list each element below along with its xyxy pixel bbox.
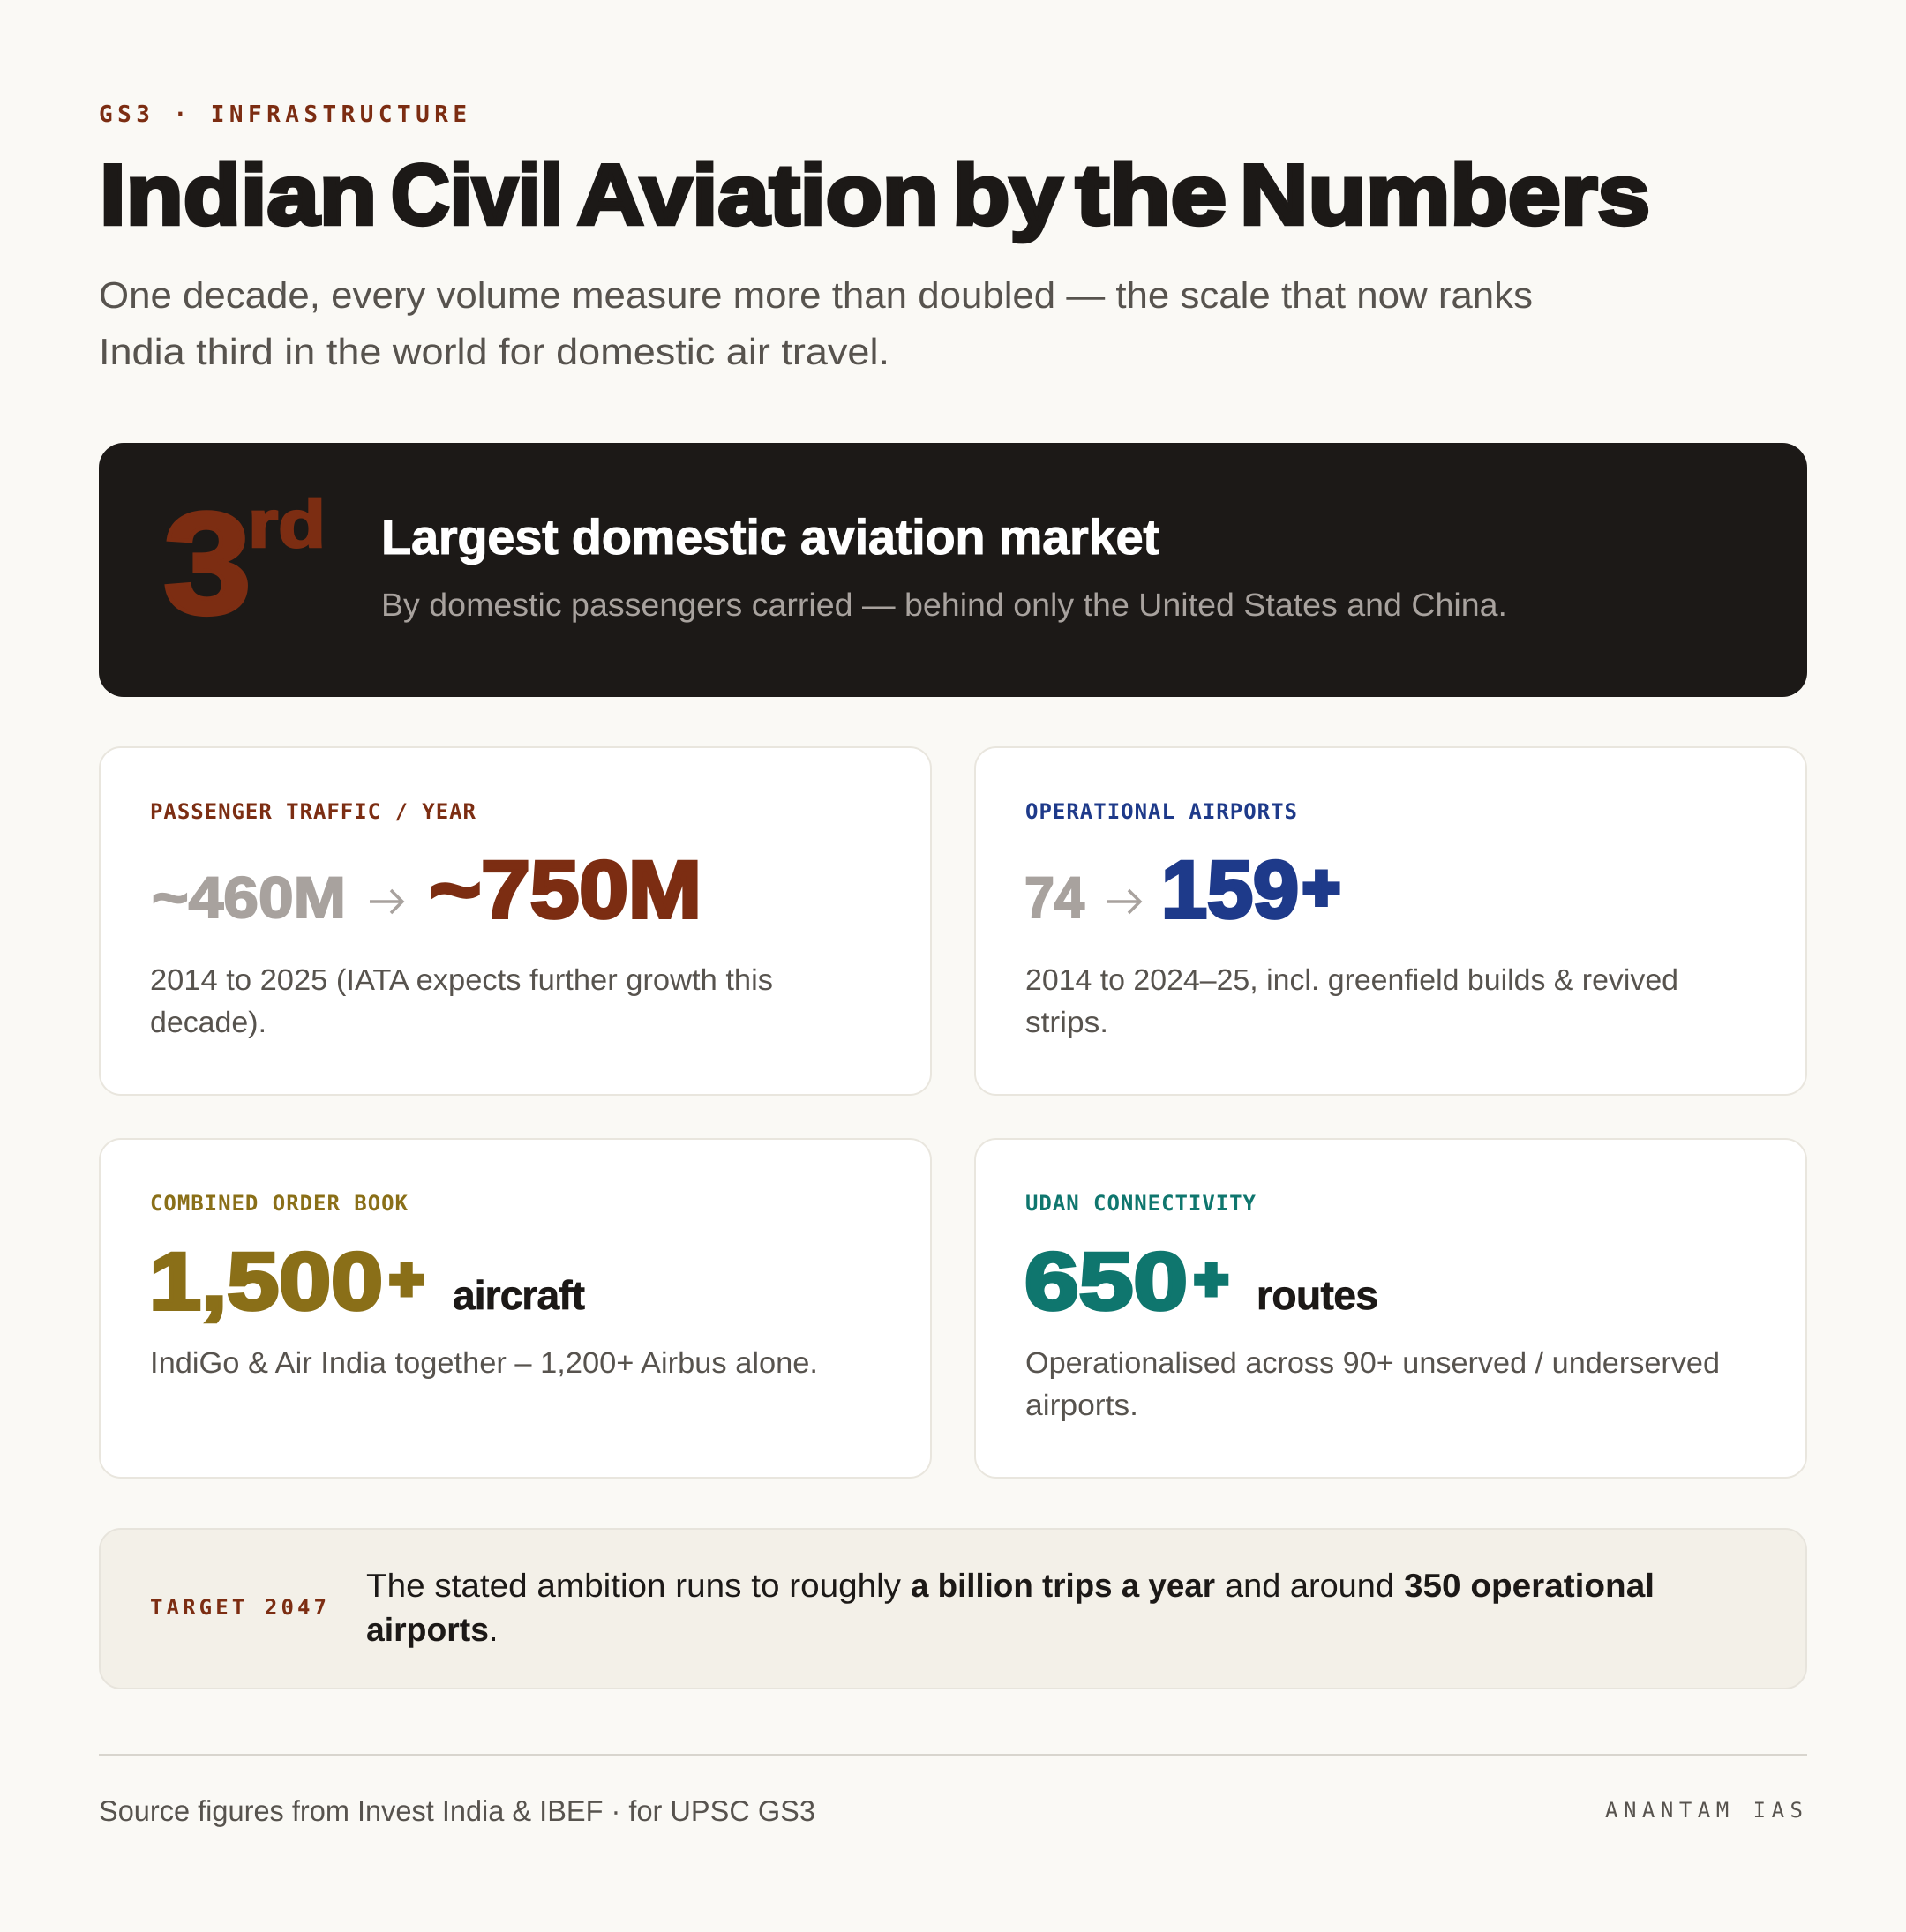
callout text: a billion trips a year [911, 1567, 1215, 1604]
arrow [370, 890, 402, 913]
panel heading: Largest domestic aviation market [381, 509, 1159, 565]
panel: 3rd largest market [99, 443, 1807, 697]
subtitle [99, 274, 1533, 372]
description: IndiGo & Air India together – 1,200+ Airbus alone. [150, 1347, 818, 1380]
arrow [1107, 890, 1140, 913]
description: strips. [1025, 1007, 1108, 1039]
callout text: . [489, 1611, 498, 1648]
card: combined order book [100, 1139, 931, 1478]
callout: target 2047 [100, 1529, 1806, 1689]
value: 1,500 [149, 1237, 383, 1327]
card: UDAN connectivity [975, 1139, 1806, 1478]
title: Aviation [577, 146, 939, 243]
subtitle: One decade, every volume measure more than doubled — the scale that now ranks [99, 274, 1533, 316]
card: passenger traffic [100, 747, 931, 1095]
card label: COMBINED ORDER BOOK [150, 1191, 409, 1216]
description: Operationalised across 90+ unserved / underserved [1025, 1347, 1720, 1380]
rank figure: 3rd [163, 483, 326, 644]
description: 2014 to 2025 (IATA expects further growth this [150, 964, 773, 997]
callout text: airports [366, 1611, 489, 1648]
footer source note: Source figures from Invest India & IBEF · for UPSC GS3 [99, 1794, 815, 1827]
subtitle: India third in the world for domestic air travel. [99, 331, 889, 372]
rank figure: 3rd: rd [248, 487, 326, 562]
description: decade). [150, 1007, 266, 1039]
new value: + [1303, 853, 1339, 922]
callout text [366, 1567, 1655, 1648]
old value: ~460M [152, 865, 346, 930]
description: 2014 to 2024–25, incl. greenfield builds & revived [1025, 964, 1678, 997]
card label: PASSENGER TRAFFIC / YEAR [150, 799, 476, 824]
eyebrow label: GS3 · INFRASTRUCTURE [99, 101, 467, 128]
title: Indian [100, 146, 377, 243]
card: operational airports [975, 747, 1806, 1095]
callout text: 350 operational [1404, 1567, 1655, 1604]
panel description: By domestic passengers carried — behind only the United States and China. [381, 587, 1507, 623]
title: the [1076, 146, 1227, 243]
title: Numbers [1240, 146, 1650, 243]
value [1024, 1237, 1227, 1327]
callout text: The stated ambition runs to roughly [366, 1567, 901, 1604]
callout label: TARGET 2047 [150, 1595, 326, 1620]
title: by [952, 146, 1062, 243]
value: + [390, 1247, 423, 1311]
description [1025, 964, 1678, 1039]
unit: aircraft [453, 1272, 585, 1318]
old value: 74 [1024, 865, 1084, 930]
description [150, 964, 773, 1039]
value: 650 [1024, 1237, 1188, 1327]
footer brand: ANANTAM IAS [1605, 1798, 1803, 1823]
new value: ~750M [430, 845, 702, 935]
value: + [1195, 1247, 1227, 1311]
new value: 159 [1161, 845, 1299, 935]
card label: OPERATIONAL AIRPORTS [1025, 799, 1297, 824]
description [1025, 1347, 1720, 1422]
card label: UDAN CONNECTIVITY [1025, 1191, 1257, 1216]
unit: routes [1257, 1272, 1378, 1318]
title [100, 146, 1650, 243]
description: airports. [1025, 1389, 1138, 1422]
title: Civil [391, 146, 563, 243]
rank figure: 3rd: 3 [163, 483, 251, 644]
callout text: and around [1225, 1567, 1394, 1604]
